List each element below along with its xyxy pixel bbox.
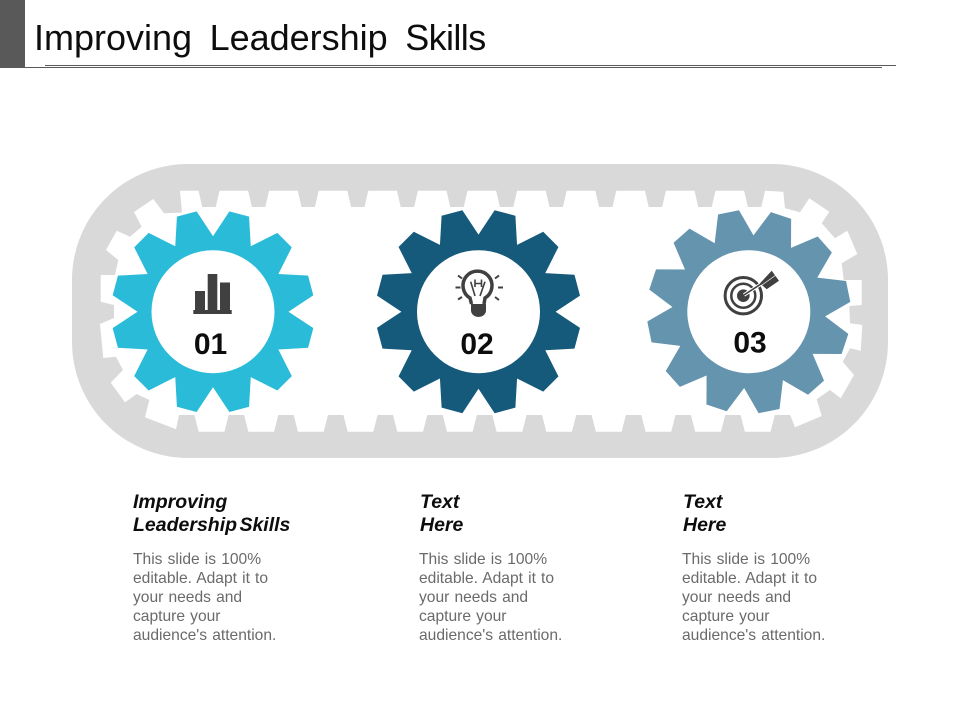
number 02: 02 [460,328,494,361]
text block: improving leadership skills heading: Leadership Skills [133,514,290,536]
toothed belt [72,164,888,458]
text block: description 3: This slide is 100% [682,551,810,568]
text block: description 2: This slide is 100% [419,551,547,568]
text block: text here heading 3 [683,491,726,536]
text block: description 2 [419,551,562,644]
text block: text here heading 2: Text [420,491,459,513]
gear 03 [642,205,855,418]
text block: description 3: editable. Adapt it to [682,570,817,587]
gear 02 [377,210,580,413]
text block: improving leadership skills heading: Improving [133,491,227,513]
icon: target with arrow [725,271,779,314]
title: Improving Leadership Skills [34,17,486,58]
header accent block [0,0,25,68]
text block: description 1 [133,551,276,644]
text block: text here heading 3: Text [683,491,722,513]
text block: description 2: editable. Adapt it to [419,570,554,587]
text block: description 2: your needs and [419,589,528,606]
gear 01 [112,210,314,413]
text block: description 3: capture your [682,608,769,625]
text block: text here heading 3: Here [683,514,726,536]
number 03: 03 [733,327,767,360]
text block: description 2: capture your [419,608,506,625]
text block: description 1: This slide is 100% [133,551,261,568]
icon: bar chart [193,274,232,314]
number 01: 01 [194,328,227,361]
text block: description 1: capture your [133,608,220,625]
text block: description 1: editable. Adapt it to [133,570,268,587]
text block: description 3: audience's attention. [682,627,825,644]
text block: text here heading 2 [420,491,463,536]
text block: description 3: your needs and [682,589,791,606]
text block: improving leadership skills heading [133,491,290,536]
text block: description 1: audience's attention. [133,627,276,644]
icon: light bulb [456,271,503,317]
text block: description 3 [682,551,825,644]
text block: description 2: audience's attention. [419,627,562,644]
text block: text here heading 2: Here [420,514,463,536]
text block: description 1: your needs and [133,589,242,606]
